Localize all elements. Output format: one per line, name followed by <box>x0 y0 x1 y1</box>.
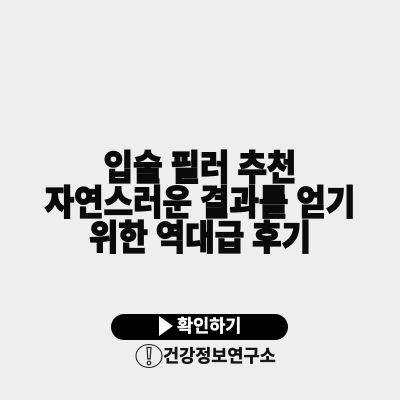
title: 입술 필러 추천 <box>104 149 296 188</box>
button label: 확인하기 <box>177 316 241 336</box>
title <box>44 149 355 258</box>
brand: 건강정보연구소 <box>135 344 276 368</box>
icon: play triangle <box>159 316 173 336</box>
button: 확인하기 <box>111 314 288 340</box>
icon: exclamation circle <box>135 344 162 368</box>
brand name: 건강정보연구소 <box>163 346 276 366</box>
title: 자연스러운 결과를 얻기 <box>45 184 355 223</box>
title: 위한 역대급 후기 <box>89 219 311 258</box>
